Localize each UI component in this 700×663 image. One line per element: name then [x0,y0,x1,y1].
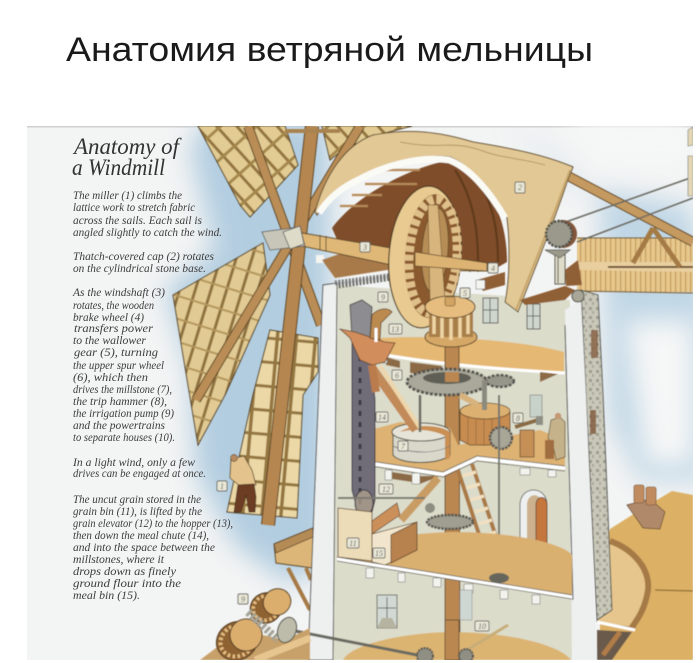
caption: grain paragraph: drops down as finely [73,566,177,578]
caption: grain paragraph: grain elevator (12) to the hopper (13), [73,518,233,530]
sail: bottom [227,330,318,518]
bottom windows [377,590,472,628]
caption: windshaft paragraph: and the powertrains [73,420,166,432]
thin pump rod [498,395,500,578]
meal chutes [372,366,478,432]
caption: cap paragraph: on the cylindrical stone base. [73,263,206,275]
number labels: 9 [241,595,245,604]
lower floor [337,532,572,604]
cap interior [332,160,507,272]
caption: miller paragraph: angled slightly to catch the wind. [73,227,222,239]
number labels: 3 [362,243,367,252]
upper spur wheel [407,369,514,395]
drive rods [290,625,508,663]
arched door [520,490,547,558]
caption: windshaft paragraph [72,287,175,444]
window mid [530,395,542,417]
wallower gear [425,296,477,347]
sky wash [165,120,700,585]
caption: windshaft paragraph: transfers power [74,323,154,335]
caption: miller paragraph: The miller (1) climbs the [73,190,182,202]
caption: windshaft paragraph: the upper spur wheel [73,360,164,372]
gear frieze [335,277,395,286]
grain elevator belt [352,340,375,516]
wooden millstone tub [460,380,510,446]
basement floor [343,632,571,660]
number labels: 14 [378,413,386,422]
tower outer stone wall [581,290,612,620]
number labels: 4 [491,264,495,273]
caption: windshaft paragraph: gear (5), turning [74,347,158,359]
number labels: 2 [518,183,522,192]
caption: grain paragraph: grain bin (11), is lifted by the [73,506,202,518]
hay field [600,485,693,660]
right gallery [597,541,650,660]
caption: grain paragraph: The uncut grain stored in the [73,494,201,506]
number labels: 1 [220,482,224,491]
upper floor [380,337,565,382]
caption: light wind paragraph: In a light wind, only a few [72,457,195,469]
caption: light wind paragraph: drives can be engaged at once. [73,468,206,480]
cap rafters [340,170,498,262]
tail beam and platform [563,127,693,293]
number labels: 8 [516,414,520,423]
upper windows [483,298,540,329]
trip hammer and worker [490,413,565,460]
sail: left [173,243,270,445]
sail stocks [196,126,360,525]
caption: miller paragraph [73,190,222,239]
number labels: 11 [349,539,357,548]
title: Анатомия ветряной мельницы [66,31,593,69]
caption: grain paragraph: meal bin (15). [73,590,140,602]
caption: heading: Anatomy of [72,134,183,159]
number labels: 12 [382,485,390,494]
number labels: 7 [401,442,406,451]
caption: grain paragraph: then down the meal chute (14), [73,530,209,542]
number labels [217,182,525,631]
caption: windshaft paragraph: brake wheel (4) [73,312,144,324]
caption: windshaft paragraph: to the wallower [73,335,147,347]
thatched cap [315,131,573,312]
brake wheel [384,184,487,330]
caption: heading: a Windmill [72,155,165,180]
lower crown gear [338,498,473,529]
caption: windshaft paragraph: (6), which then [73,372,148,384]
caption: heading [72,134,183,180]
caption: miller paragraph: lattice work to stretch fabric [73,202,195,214]
caption: grain paragraph [73,494,233,602]
caption: windshaft paragraph: drives the millstone (7), [73,384,172,396]
caption: windshaft paragraph: As the windshaft (3) [72,287,165,299]
main vertical shaft [445,338,460,660]
number labels: 15 [375,549,383,558]
meal bin [372,522,417,565]
caption: miller paragraph: across the sails. Each sail is [73,215,203,227]
hub [262,226,305,250]
caption: windshaft paragraph: the irrigation pump (9) [73,408,174,420]
number labels: 13 [391,325,399,334]
number labels: 9 [381,293,385,302]
caption: cap paragraph [73,251,215,275]
mid floor platform [370,422,565,484]
gear assembly at cap tail [545,220,584,302]
ladder [456,463,498,535]
tower interior wall [333,285,572,660]
caption: windshaft paragraph: the trip hammer (8), [73,396,167,408]
windshaft [302,233,487,272]
sail: upper left [198,126,298,217]
hopper [340,300,395,392]
caption: windshaft paragraph: rotates, the wooden [73,300,154,312]
irrigation pump [200,584,310,663]
caption: grain paragraph: and into the space between the [73,542,215,554]
caption: light wind paragraph [72,457,206,480]
millstone [392,423,450,462]
number labels: 5 [463,289,467,298]
number labels: 10 [478,622,486,631]
caption: cap paragraph: Thatch-covered cap (2) rotates [73,251,215,263]
number labels: 6 [395,371,399,380]
cap underside support [316,252,575,305]
tower left wall [308,283,337,660]
caption: windshaft paragraph: to separate houses (10). [73,432,175,444]
caption: grain paragraph: ground flour into the [73,578,181,590]
tower right wall [565,300,597,660]
basement shaft [445,620,459,660]
sail: upper right [322,126,412,160]
meal chute lower [401,478,438,520]
illustration panel [27,120,700,663]
left gallery [274,528,313,610]
grain bin [338,503,400,561]
miller figure [230,455,256,512]
caption: grain paragraph: millstones, where it [73,554,165,566]
